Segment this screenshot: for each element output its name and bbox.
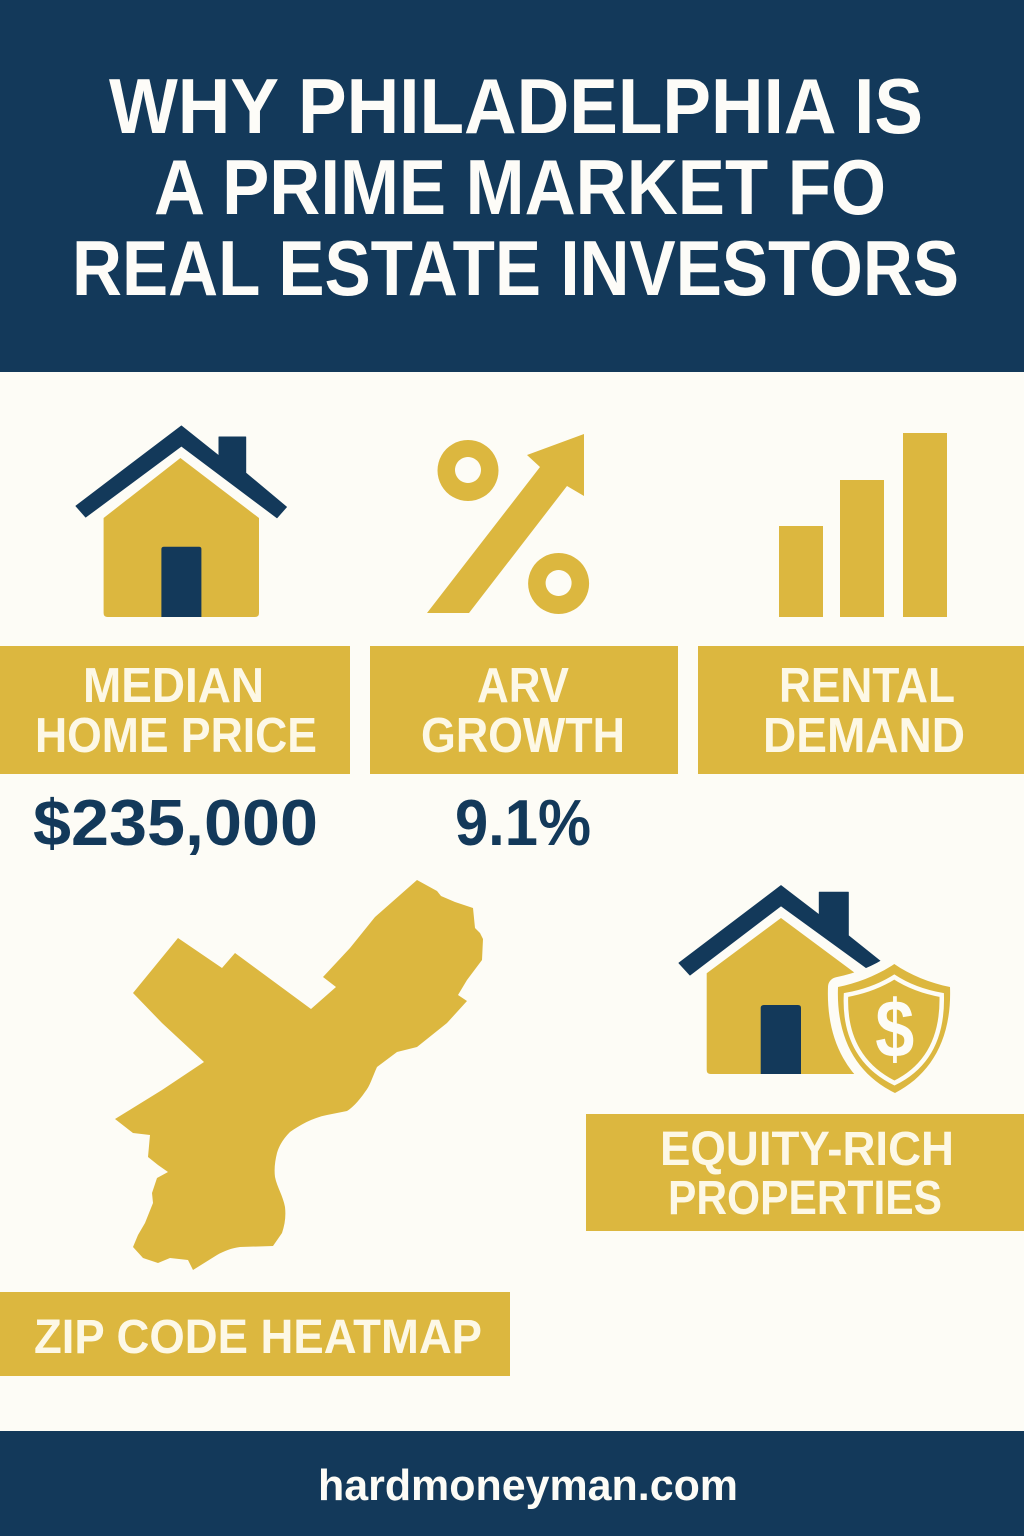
title <box>72 62 959 312</box>
value: arv growth: 9.1% <box>455 786 591 859</box>
panel: rental demand <box>698 433 1024 774</box>
label: arv growth: ARV <box>477 659 569 713</box>
label: median home price: MEDIAN <box>83 659 264 713</box>
icon: house with dollar shield <box>679 886 950 1093</box>
label: rental demand: RENTAL <box>779 659 955 713</box>
label: median home price <box>0 646 350 774</box>
label: equity-rich properties: EQUITY-RICH <box>660 1123 954 1176</box>
icon: shield: $ <box>875 984 914 1075</box>
value: median home price: $235,000 <box>33 786 318 859</box>
label: median home price: HOME PRICE <box>35 709 317 763</box>
footer website: hardmoneyman.com <box>318 1461 738 1510</box>
panel: arv growth <box>370 434 678 859</box>
title: A PRIME MARKET FO <box>154 143 886 231</box>
label: arv growth <box>370 646 678 774</box>
header banner <box>0 0 1024 372</box>
label: arv growth: GROWTH <box>421 709 625 763</box>
label: rental demand <box>698 646 1024 774</box>
panel: median home price <box>0 426 350 859</box>
label: zip code heatmap: ZIP CODE HEATMAP <box>34 1311 482 1364</box>
map: philadelphia outline <box>115 880 483 1270</box>
icon: percent with rising arrow <box>427 434 589 614</box>
label: rental demand: DEMAND <box>763 709 965 763</box>
label: equity-rich properties: PROPERTIES <box>668 1172 942 1225</box>
panel: equity-rich properties <box>586 886 1024 1231</box>
icon: shield <box>838 964 950 1093</box>
icon: bar chart <box>779 433 947 617</box>
icon: house <box>76 426 286 617</box>
label: zip code heatmap <box>0 1292 510 1376</box>
panel: zip code heatmap <box>0 880 510 1376</box>
title: WHY PHILADELPHIA IS <box>109 62 923 150</box>
label: equity-rich properties <box>586 1114 1024 1231</box>
footer banner <box>0 1431 1024 1536</box>
